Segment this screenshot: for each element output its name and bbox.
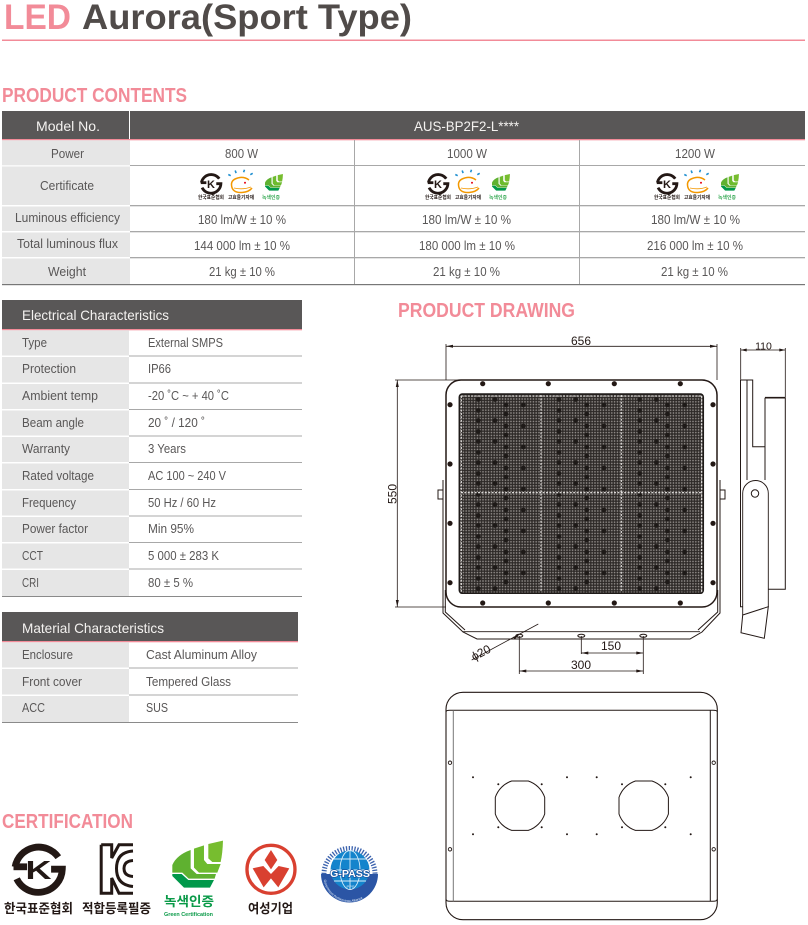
row: CCT: CCT	[22, 549, 43, 563]
row: power: 1000 W	[447, 147, 487, 161]
row: front cover: Front cover	[22, 675, 82, 689]
icons: certificate marks, 1000 W: 한국표준협회	[425, 194, 451, 201]
bracket behind frame	[443, 480, 720, 639]
row: total luminous flux: 180 000 lm ± 10 %	[419, 239, 515, 253]
row: CCT	[22, 549, 220, 563]
row: CRI: 80 ± 5 %	[148, 576, 193, 590]
row: warranty	[22, 442, 186, 456]
row: frequency: Frequency	[22, 496, 77, 510]
pivot arm	[743, 480, 768, 615]
logo: green certification: 녹색인증	[164, 894, 214, 909]
row: certificate	[40, 170, 739, 201]
logo: women enterprise	[247, 845, 295, 916]
row: protection: IP66	[148, 362, 171, 376]
row: power factor: Min 95%	[148, 522, 194, 536]
side screws	[448, 761, 715, 851]
row: power factor: Power factor	[22, 522, 88, 536]
logo: green certification	[164, 841, 223, 918]
mounting bolts	[447, 381, 716, 606]
drawing: back view	[446, 692, 717, 920]
row: weight: 21 kg ± 10 %	[661, 265, 728, 279]
logo: KC mark	[82, 845, 151, 916]
header row: Model No.	[36, 118, 100, 134]
panel: electrical characteristics	[2, 300, 302, 597]
panel: product contents table	[2, 111, 805, 285]
logo: G-PASS: PPS	[346, 884, 355, 889]
icons: certificate marks, 800 W: 고효율기자재	[228, 194, 254, 201]
dimension: 300: 300	[571, 658, 591, 672]
row: rated voltage: Rated voltage	[22, 469, 94, 483]
row: beam angle: Beam angle	[22, 416, 84, 430]
row: front cover	[22, 675, 231, 689]
icons: certificate marks, 800 W: 녹색인증	[262, 194, 280, 201]
logo: KC mark: 적합등록필증	[82, 901, 151, 916]
row: ambient temp: -20 ˚C ~ + 40 ˚C	[148, 389, 229, 403]
row: CRI: CRI	[22, 576, 39, 590]
heading: electrical characteristics: Electrical Characteristics	[22, 307, 169, 323]
row: type	[22, 336, 223, 350]
row: enclosure: Cast Aluminum Alloy	[146, 648, 258, 662]
row: protection	[22, 362, 171, 376]
row: certificate: Certificate	[40, 179, 94, 193]
row: power: 800 W	[225, 147, 258, 161]
row: warranty: Warranty	[22, 442, 71, 456]
icons: certificate marks, 1200 W: 녹색인증	[718, 194, 736, 201]
icons: certificate marks, 1000 W: 녹색인증	[489, 194, 507, 201]
row: enclosure	[22, 648, 258, 662]
row: power	[51, 147, 715, 161]
row: ambient temp	[22, 389, 229, 403]
panel: material characteristics	[2, 612, 298, 723]
row: power factor	[22, 522, 194, 536]
dimension: 300	[519, 636, 643, 674]
dimension: 150	[581, 636, 643, 674]
row: frequency	[22, 496, 216, 510]
heading: product drawing: PRODUCT DRAWING	[398, 300, 575, 322]
icons: certificate marks, 1000 W: K	[434, 179, 442, 191]
icons: certificate marks, 800 W	[198, 170, 283, 201]
row: ambient temp: Ambient temp	[22, 389, 98, 403]
LED panel	[459, 394, 703, 593]
cable holes	[516, 634, 647, 637]
row: type: External SMPS	[148, 336, 223, 350]
dimension: diameter 20	[469, 624, 538, 664]
row: total luminous flux	[17, 237, 743, 253]
row: weight: 21 kg ± 10 %	[433, 265, 500, 279]
row: luminous efficiency: 180 lm/W ± 10 %	[651, 213, 740, 227]
icons: certificate marks, 1200 W: 한국표준협회	[654, 194, 680, 201]
heading: product contents: PRODUCT CONTENTS	[2, 85, 187, 107]
logo: G-PASS: Government Performance Alliance	[324, 880, 362, 902]
icons: certificate marks, 1200 W: K	[663, 179, 671, 191]
row: power: Power	[51, 147, 84, 161]
dimension: 110	[741, 340, 785, 397]
drawing: front view	[386, 334, 725, 674]
icons: certificate marks, 1000 W	[425, 170, 510, 201]
row: ACC: ACC	[22, 701, 45, 715]
row: front cover: Tempered Glass	[146, 675, 231, 689]
row: ACC	[22, 701, 168, 715]
dimension: 110: 110	[755, 340, 772, 352]
row: weight: 21 kg ± 10 %	[209, 265, 275, 279]
logo: green certification: Green Certification	[164, 912, 213, 918]
drawing: side view	[740, 340, 785, 638]
row: rated voltage	[22, 469, 227, 483]
row: frequency: 50 Hz / 60 Hz	[148, 496, 216, 510]
row: ACC: SUS	[146, 701, 168, 715]
row: weight: Weight	[48, 265, 87, 279]
cut-out left	[495, 781, 545, 830]
row: luminous efficiency: 180 lm/W ± 10 %	[198, 213, 286, 227]
mounting points	[472, 776, 692, 835]
icons: certificate marks, 1200 W	[654, 170, 739, 201]
row: luminous efficiency: 180 lm/W ± 10 %	[422, 213, 511, 227]
header row: AUS-BP2F2-L****	[414, 118, 520, 134]
row: enclosure: Enclosure	[22, 648, 73, 662]
logo: KS mark	[4, 847, 73, 916]
row: rated voltage: AC 100 ~ 240 V	[148, 469, 227, 483]
logo: KS mark: K	[26, 855, 52, 885]
row: CRI	[22, 576, 193, 590]
title	[2, 0, 805, 41]
row: warranty: 3 Years	[148, 442, 186, 456]
logo: G-PASS	[321, 846, 378, 902]
row: type: Type	[22, 336, 47, 350]
dimension: 550	[386, 380, 460, 607]
dimension: 150: 150	[601, 639, 621, 653]
row: luminous efficiency: Luminous efficiency	[15, 211, 121, 225]
dimension: 550: 550	[386, 484, 400, 504]
row: power: 1200 W	[675, 147, 715, 161]
icons: certificate marks, 800 W: 한국표준협회	[198, 194, 224, 201]
cut-out right	[619, 781, 668, 830]
dimension: 656	[446, 334, 717, 380]
row: weight	[48, 265, 728, 279]
row: luminous efficiency	[15, 211, 740, 227]
icons: certificate marks, 1200 W: 고효율기자재	[684, 194, 710, 201]
logo: women enterprise: 여성기업	[248, 901, 293, 916]
row: protection: Protection	[22, 362, 76, 376]
header row	[36, 118, 520, 134]
icons: certificate marks, 1000 W: 고효율기자재	[455, 194, 481, 201]
row: total luminous flux: 216 000 lm ± 10 %	[647, 239, 743, 253]
dimension: 656: 656	[571, 334, 591, 348]
row: total luminous flux: 144 000 lm ± 10 %	[194, 239, 290, 253]
dimension: diameter 20: ϕ20	[469, 642, 493, 664]
heading: material characteristics: Material Characteristics	[22, 620, 164, 636]
logo: KS mark: 한국표준협회	[4, 901, 73, 916]
row: beam angle	[22, 416, 205, 430]
row: total luminous flux: Total luminous flux	[17, 237, 119, 251]
icons: certificate marks, 800 W: K	[207, 179, 215, 191]
row: beam angle: 20 ˚ / 120 ˚	[148, 416, 205, 430]
heading: certification: CERTIFICATION	[2, 811, 133, 833]
row: CCT: 5 000 ± 283 K	[148, 549, 220, 563]
logo: G-PASS: G-PASS	[330, 869, 370, 880]
